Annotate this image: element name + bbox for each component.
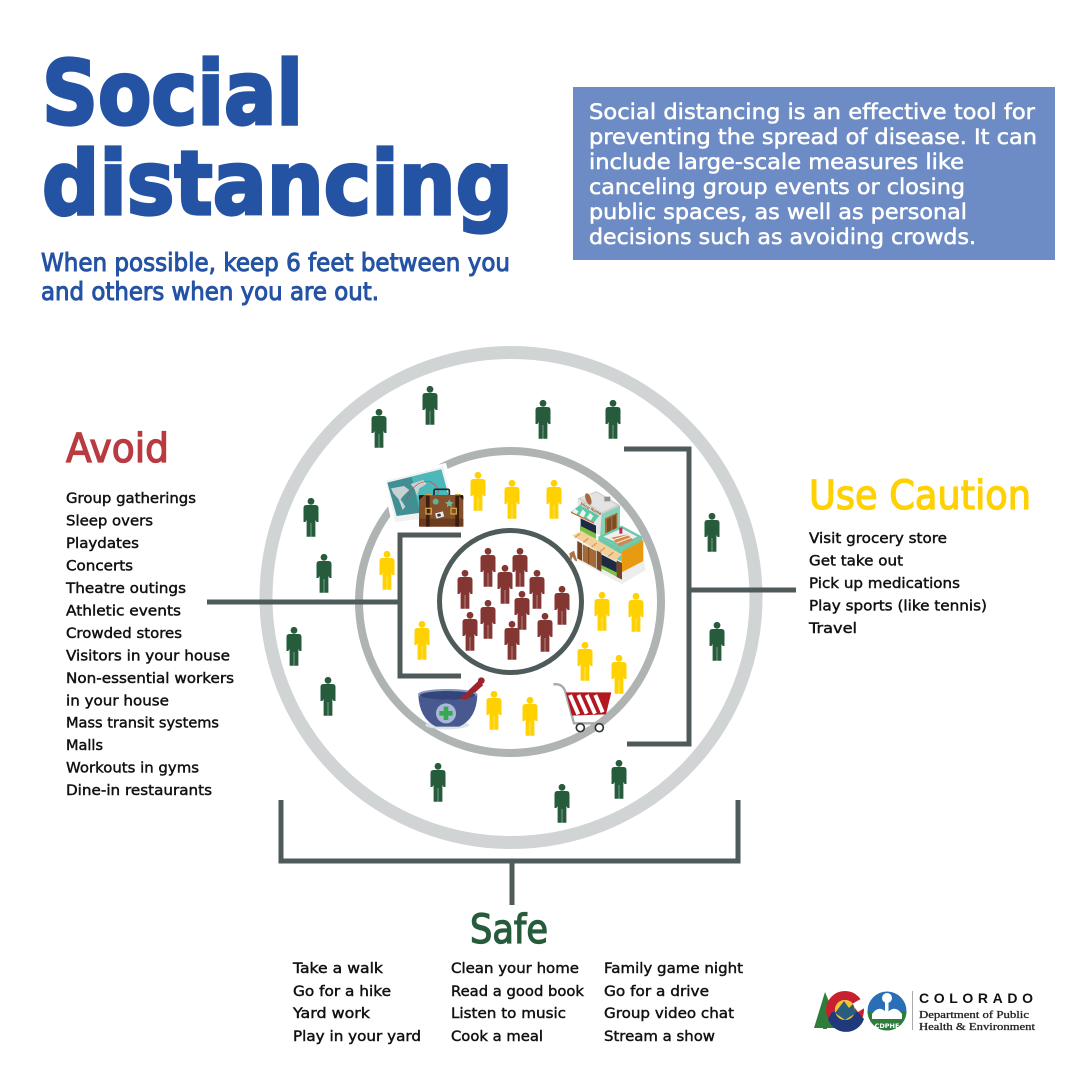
list: avoid: Dine-in restaurants bbox=[66, 783, 212, 799]
subtitle: When possible, keep 6 feet between you bbox=[41, 248, 510, 277]
panel: definition callout: preventing the spread of disease. It can bbox=[589, 125, 1037, 150]
list: safe, column 3: Group video chat bbox=[604, 1006, 734, 1022]
middle ring: caution zone bbox=[359, 451, 661, 753]
list: avoid: Athletic events bbox=[66, 603, 181, 619]
list: avoid: Concerts bbox=[66, 558, 133, 574]
list: safe, column 3: Go for a drive bbox=[604, 984, 709, 1000]
list: safe, column 1: Take a walk bbox=[292, 961, 384, 977]
list: avoid: Playdates bbox=[66, 536, 139, 552]
icon: storefront: Shop Name bbox=[580, 502, 603, 516]
icon: map and suitcase bbox=[385, 466, 463, 527]
list: safe, column 1: Yard work bbox=[292, 1006, 371, 1022]
list: use caution: Get take out bbox=[809, 554, 903, 570]
list: safe, column 3: Family game night bbox=[604, 961, 743, 977]
list: avoid: Theatre outings bbox=[65, 581, 186, 597]
list: avoid: Crowded stores bbox=[66, 626, 182, 642]
panel: definition callout: public spaces, as well as personal bbox=[589, 200, 967, 225]
bracket: safe bbox=[281, 800, 738, 905]
list: avoid: in your house bbox=[66, 693, 169, 709]
list: safe, column 2 bbox=[451, 961, 585, 1045]
panel: definition callout: Social distancing is an effective tool for bbox=[589, 100, 1035, 125]
red people: avoid bbox=[458, 548, 570, 660]
list: safe, column 3 bbox=[604, 961, 743, 1045]
bracket: use caution bbox=[624, 449, 796, 744]
list: avoid: Non-essential workers bbox=[66, 671, 234, 687]
list: avoid: Visitors in your house bbox=[66, 648, 230, 664]
icon: storefront bbox=[569, 491, 646, 584]
logo: Colorado CDPHE: Department of Public bbox=[919, 1010, 1029, 1021]
icon: mortar and pestle bbox=[418, 677, 485, 729]
inner ring: avoid zone bbox=[440, 530, 582, 672]
logo: Colorado CDPHE bbox=[814, 990, 1035, 1033]
title: Social bbox=[42, 42, 303, 145]
yellow people: use caution bbox=[380, 472, 644, 736]
logo: Colorado CDPHE: Health & Environment bbox=[919, 1022, 1035, 1033]
heading: avoid: Avoid bbox=[66, 426, 169, 472]
list: safe, column 1: Go for a hike bbox=[293, 984, 391, 1000]
heading: safe: Safe bbox=[470, 907, 548, 953]
bracket: avoid bbox=[207, 535, 461, 676]
list: use caution: Visit grocery store bbox=[809, 531, 947, 547]
logo: Colorado CDPHE: COLORADO bbox=[919, 990, 1033, 1006]
panel: definition callout: canceling group events or closing bbox=[589, 175, 965, 200]
list: safe, column 2: Listen to music bbox=[451, 1006, 566, 1022]
logo: Colorado CDPHE: CDPHE bbox=[875, 1022, 899, 1030]
panel: definition callout bbox=[573, 87, 1055, 260]
panel: definition callout: decisions such as avoiding crowds. bbox=[589, 225, 976, 250]
list: safe, column 2: Cook a meal bbox=[451, 1029, 543, 1045]
list: avoid: Malls bbox=[66, 738, 103, 754]
list: use caution: Travel bbox=[808, 621, 857, 637]
title: distancing bbox=[42, 132, 513, 235]
list: use caution: Play sports (like tennis) bbox=[809, 598, 987, 614]
subtitle: and others when you are out. bbox=[41, 277, 379, 306]
title bbox=[42, 42, 513, 235]
list: avoid: Sleep overs bbox=[66, 513, 153, 529]
list: use caution: Pick up medications bbox=[809, 576, 960, 592]
list: avoid bbox=[65, 491, 234, 799]
list: use caution bbox=[808, 531, 987, 637]
list: safe, column 2: Clean your home bbox=[451, 961, 579, 977]
list: safe, column 2: Read a good book bbox=[451, 984, 585, 1000]
green people: safe bbox=[286, 386, 724, 823]
icon: shopping cart bbox=[553, 684, 611, 732]
list: safe, column 1: Play in your yard bbox=[293, 1029, 421, 1045]
subtitle bbox=[41, 248, 510, 306]
list: safe, column 1 bbox=[292, 961, 421, 1045]
list: safe, column 3: Stream a show bbox=[604, 1029, 715, 1045]
list: avoid: Mass transit systems bbox=[66, 716, 219, 732]
list: avoid: Workouts in gyms bbox=[66, 760, 199, 776]
outer ring: safe zone bbox=[266, 352, 756, 842]
list: avoid: Group gatherings bbox=[66, 491, 196, 507]
heading: use caution: Use Caution bbox=[809, 473, 1031, 519]
panel: definition callout: include large-scale measures like bbox=[589, 150, 964, 175]
